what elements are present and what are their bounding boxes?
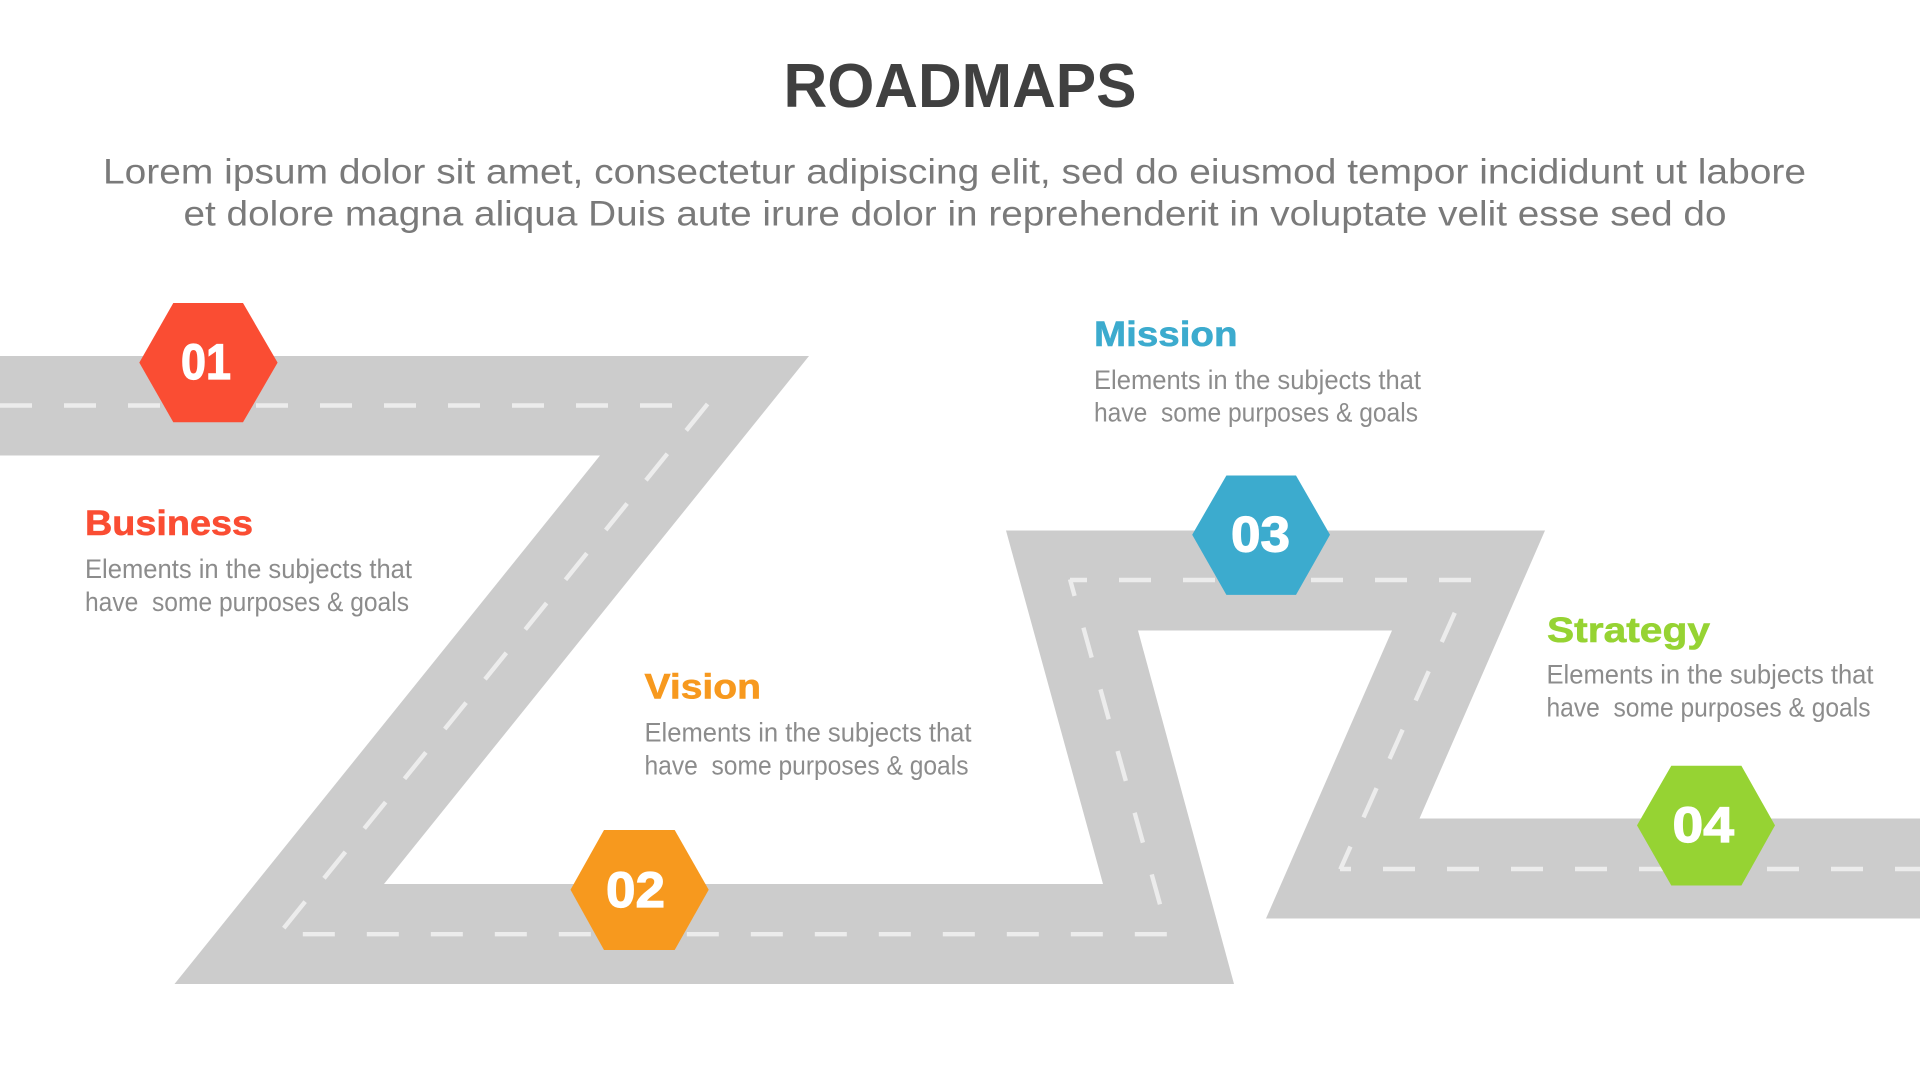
hexagon marker 04: 04: [1672, 797, 1734, 853]
text block: Business: have some purposes & goals: [85, 587, 409, 617]
road: [0, 356, 1920, 984]
text block: Mission: [1094, 315, 1421, 428]
title: ROADMAPS: [784, 52, 1136, 121]
text block: Mission: Mission: [1094, 315, 1238, 354]
text block: Business: Elements in the subjects that: [85, 554, 412, 584]
text block: Strategy: Elements in the subjects that: [1546, 660, 1874, 690]
text block: Vision: Vision: [644, 668, 761, 707]
hexagon marker 03: [1192, 476, 1330, 595]
subtitle text block: et dolore magna aliqua Duis aute irure dolor in reprehenderit in voluptate velit esse sed do: [184, 194, 1726, 234]
text block: Strategy: [1546, 611, 1874, 722]
hexagon marker 02: [570, 830, 709, 950]
text block: Business: [85, 504, 412, 617]
road centre dashes: [0, 404, 1920, 934]
text block: Mission: have some purposes & goals: [1094, 398, 1418, 428]
hexagon marker 02: 02: [606, 862, 665, 918]
hexagon marker 01: 01: [181, 334, 231, 390]
road surface: [0, 356, 1920, 984]
text block: Vision: [644, 668, 972, 780]
text block: Vision: Elements in the subjects that: [644, 718, 972, 748]
text block: Strategy: have some purposes & goals: [1546, 692, 1870, 722]
text block: Strategy: Strategy: [1547, 611, 1711, 650]
text block: Vision: have some purposes & goals: [644, 750, 968, 780]
subtitle text block: [103, 152, 1806, 234]
hexagon marker 04: [1637, 766, 1775, 886]
text block: Business: Business: [85, 504, 253, 543]
hexagon marker 01: [139, 303, 278, 422]
text block: Mission: Elements in the subjects that: [1094, 365, 1421, 395]
hexagon marker 03: 03: [1231, 506, 1290, 562]
subtitle text block: Lorem ipsum dolor sit amet, consectetur adipiscing elit, sed do eiusmod tempor incididunt ut labore: [103, 152, 1806, 192]
